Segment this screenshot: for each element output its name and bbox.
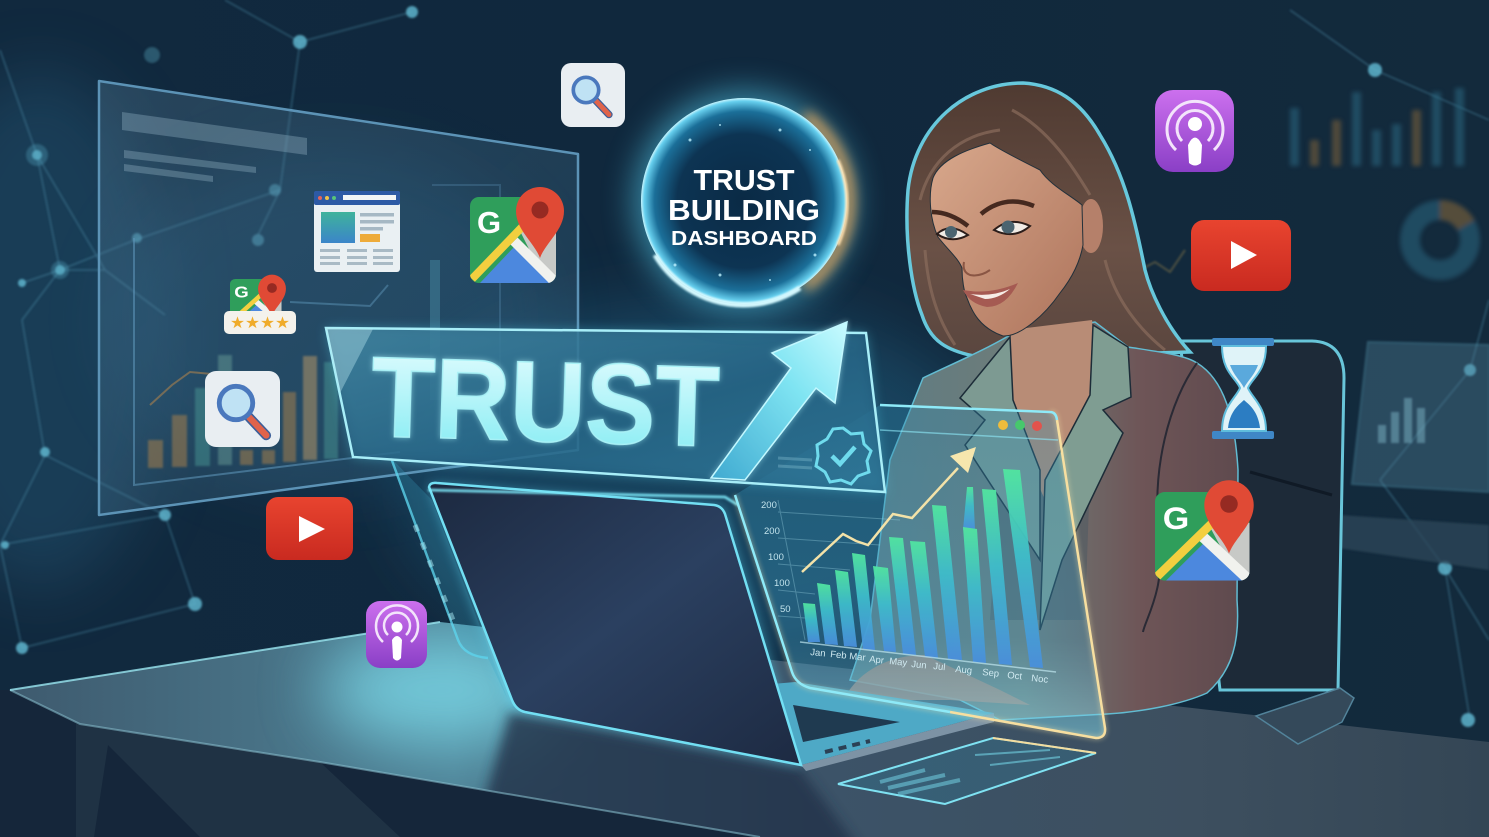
verified badge — [816, 428, 871, 484]
sphere: title: DASHBOARD — [671, 228, 817, 250]
hair strands — [920, 110, 1165, 350]
TRUST word: TRUST — [369, 334, 721, 471]
lid — [429, 483, 801, 765]
x axis labels: May — [889, 656, 908, 669]
brows — [932, 202, 1034, 226]
icon: web page — [314, 191, 400, 272]
trust banner — [326, 322, 885, 492]
mouth — [963, 283, 1018, 307]
grid lines — [778, 500, 900, 640]
banner text lines — [778, 458, 812, 468]
x axis labels: Jul — [933, 661, 946, 673]
x axis labels: Oct — [1007, 670, 1023, 683]
holographic left screen — [391, 458, 738, 700]
background line chart — [1140, 250, 1185, 272]
window dots — [998, 420, 1008, 430]
sphere: title: BUILDING — [668, 195, 820, 227]
icon: youtube right — [1191, 220, 1291, 291]
trend line — [802, 447, 976, 572]
right lapel — [1040, 325, 1131, 630]
keyboard deck — [511, 682, 994, 765]
desk — [0, 622, 1489, 837]
hands — [845, 655, 1030, 705]
face — [930, 143, 1083, 336]
y axis labels — [761, 500, 791, 615]
y axis labels: 200 — [761, 500, 777, 511]
y axis labels: 50 — [780, 604, 791, 615]
sphere: title — [641, 98, 847, 305]
bars — [803, 469, 1043, 668]
floating document on desk — [838, 738, 1096, 804]
icon: podcast top — [1155, 90, 1234, 172]
left lapel — [960, 337, 1040, 560]
icon: search left — [205, 371, 280, 447]
woman — [845, 83, 1238, 720]
left panel bars — [148, 355, 338, 468]
nose — [964, 262, 990, 275]
icon: youtube left — [266, 497, 353, 560]
blazer — [850, 322, 1238, 720]
x axis labels: Sep — [982, 667, 1000, 680]
left holographic panel — [99, 81, 578, 515]
chart panel — [735, 405, 1105, 738]
background monitor right — [1338, 342, 1489, 570]
x axis labels: Noc — [1031, 673, 1049, 686]
sphere glow — [634, 91, 854, 311]
icon: podcast bottom — [366, 601, 427, 668]
icon: maps with stars: ★★★★ — [230, 315, 290, 332]
chair — [1180, 341, 1354, 744]
lid glow — [429, 485, 801, 765]
y axis labels: 200 — [764, 526, 780, 537]
right sleeve seam — [1143, 363, 1197, 632]
laptop — [429, 483, 994, 771]
icon: hourglass — [1212, 338, 1274, 439]
shirt — [990, 410, 1092, 620]
icon: google maps right — [1155, 480, 1254, 581]
neck and chest — [1000, 320, 1100, 500]
x axis labels: Jan — [810, 647, 826, 660]
icon: google maps large — [470, 187, 564, 283]
sphere: title: TRUST — [694, 165, 795, 197]
ear — [1079, 199, 1103, 253]
eyes — [937, 228, 968, 239]
icon: search top — [561, 63, 625, 127]
x axis labels: Apr — [869, 654, 885, 667]
y axis labels: 100 — [768, 552, 784, 563]
icon: maps with stars — [224, 275, 296, 334]
x axis labels: Feb — [830, 649, 847, 662]
background donut chart — [1410, 210, 1470, 270]
background bar chart top right — [1290, 88, 1464, 166]
x axis labels: Mar — [849, 651, 866, 664]
y axis labels: 100 — [774, 578, 790, 589]
arrow — [711, 322, 847, 480]
x axis labels: Aug — [955, 664, 973, 677]
hair back — [907, 83, 1190, 358]
x axis labels: Jun — [911, 659, 927, 672]
x axis labels — [810, 647, 1049, 686]
